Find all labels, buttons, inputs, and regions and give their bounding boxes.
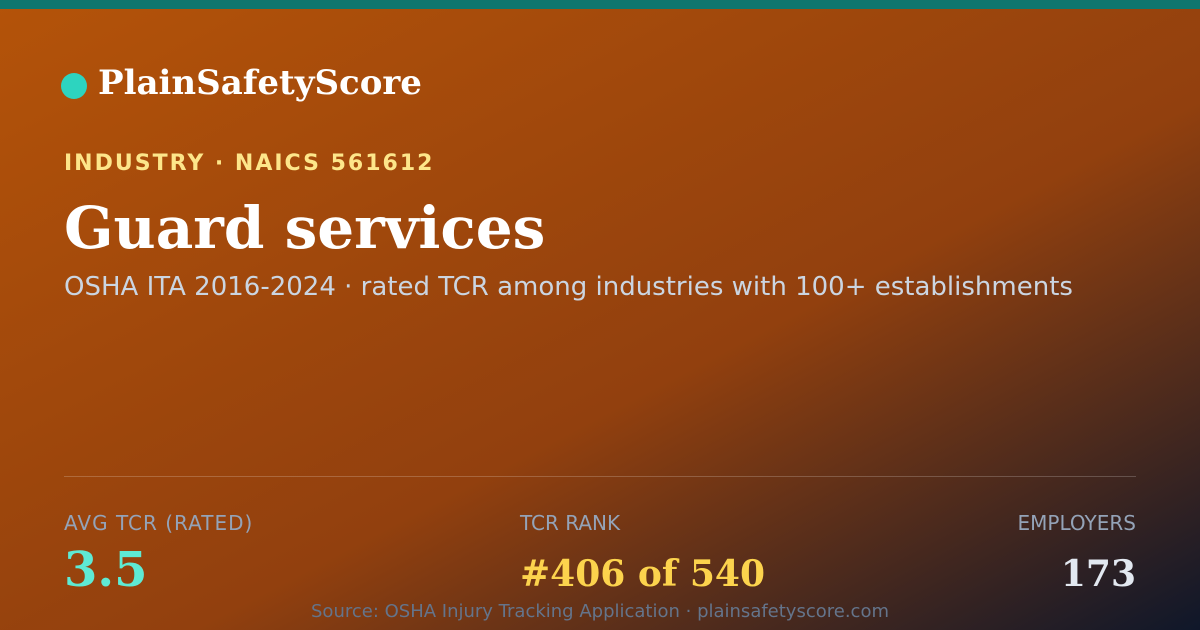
subtitle: OSHA ITA 2016-2024 · rated TCR among industries with 100+ establishments xyxy=(64,272,1073,302)
stat: average TCR xyxy=(64,511,253,598)
brand name: PlainSafetyScore xyxy=(98,63,422,103)
logo: brand mark and name xyxy=(61,63,422,103)
stat: employers xyxy=(1018,511,1136,595)
stat label: AVG TCR (RATED) xyxy=(64,511,253,535)
divider xyxy=(64,476,1136,477)
stat label: TCR RANK xyxy=(520,511,620,535)
title: Guard services xyxy=(64,194,545,262)
stat value: #406 of 540 xyxy=(520,553,765,595)
stat value: 173 xyxy=(1061,553,1136,595)
stat value: 3.5 xyxy=(64,542,148,598)
source footnote: Source: OSHA Injury Tracking Application · plainsafetyscore.com xyxy=(311,601,889,622)
eyebrow: industry code: INDUSTRY · NAICS 561612 xyxy=(64,151,434,176)
stat label: EMPLOYERS xyxy=(1018,511,1136,535)
icon: brand dot xyxy=(61,73,87,99)
top accent bar xyxy=(0,0,1200,9)
stat: TCR rank xyxy=(520,511,765,595)
